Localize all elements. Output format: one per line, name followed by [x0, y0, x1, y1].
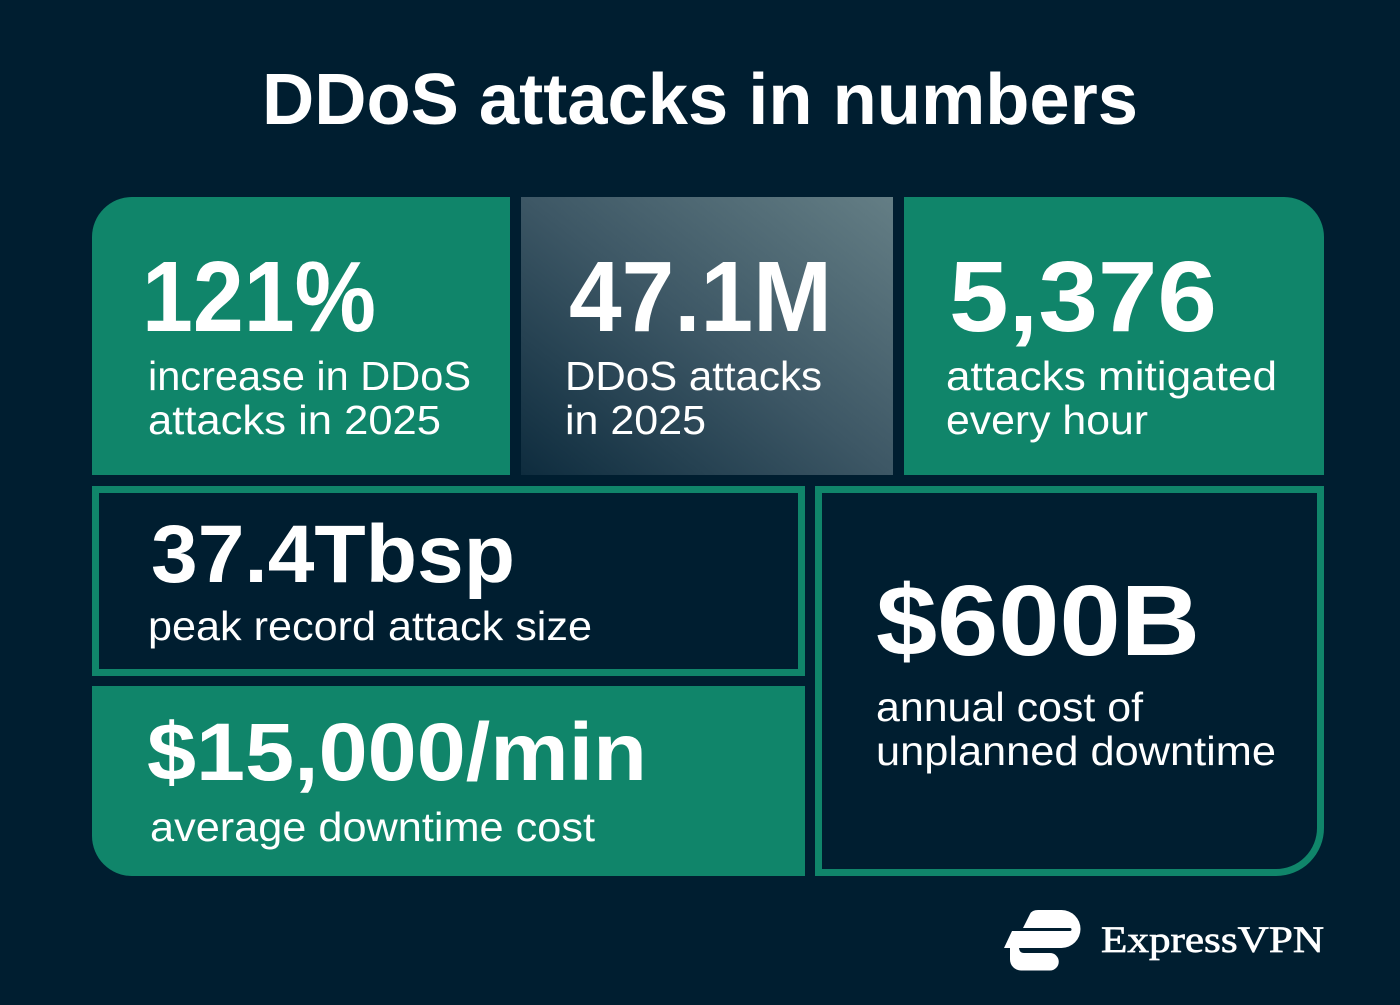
stat: 121%: 121% — [142, 241, 376, 353]
stat: 5,376: 5,376 — [949, 241, 1217, 353]
wordmark: ExpressVPN — [1101, 920, 1324, 961]
label: DDoS attacks in 2025: DDoS attacks — [565, 353, 822, 399]
stat: 47.1M: 47.1M — [569, 241, 832, 353]
label: increase in DDoS attacks in 2025: increase in DDoS — [148, 353, 471, 399]
label: annual cost of unplanned downtime: unplanned downtime — [876, 728, 1276, 774]
label: annual cost of unplanned downtime: annual cost of — [876, 684, 1144, 730]
title: DDoS attacks in numbers — [262, 60, 1138, 140]
stat: $15,000/min: $15,000/min — [147, 707, 647, 798]
label: attacks mitigated every hour: attacks mitigated — [946, 353, 1277, 399]
stat: $600B: $600B — [876, 565, 1200, 677]
label: increase in DDoS attacks in 2025: attacks in 2025 — [148, 397, 441, 443]
label: peak record attack size: peak record attack size — [148, 603, 592, 649]
label: annual cost of unplanned downtime — [876, 684, 1276, 774]
label: DDoS attacks in 2025: in 2025 — [565, 397, 706, 443]
label: average downtime cost: average downtime cost — [150, 804, 596, 850]
panel: 5,376 mitigated — [904, 197, 1324, 475]
panel: 47.1M attacks — [521, 197, 893, 475]
panel: 37.4Tbsp peak — [96, 490, 802, 672]
logo: ExpressVPN — [1004, 910, 1324, 970]
panel: $15,000/min downtime — [92, 686, 805, 876]
icon: ExpressVPN mark — [1004, 910, 1080, 970]
label: DDoS attacks in 2025 — [565, 353, 822, 443]
panel: $600B annual cost — [818, 490, 1320, 872]
stat: 37.4Tbsp: 37.4Tbsp — [151, 509, 515, 600]
label: attacks mitigated every hour — [946, 353, 1277, 443]
label: increase in DDoS attacks in 2025 — [148, 353, 471, 443]
panel: 121% increase — [92, 197, 510, 475]
label: attacks mitigated every hour: every hour — [946, 397, 1148, 443]
